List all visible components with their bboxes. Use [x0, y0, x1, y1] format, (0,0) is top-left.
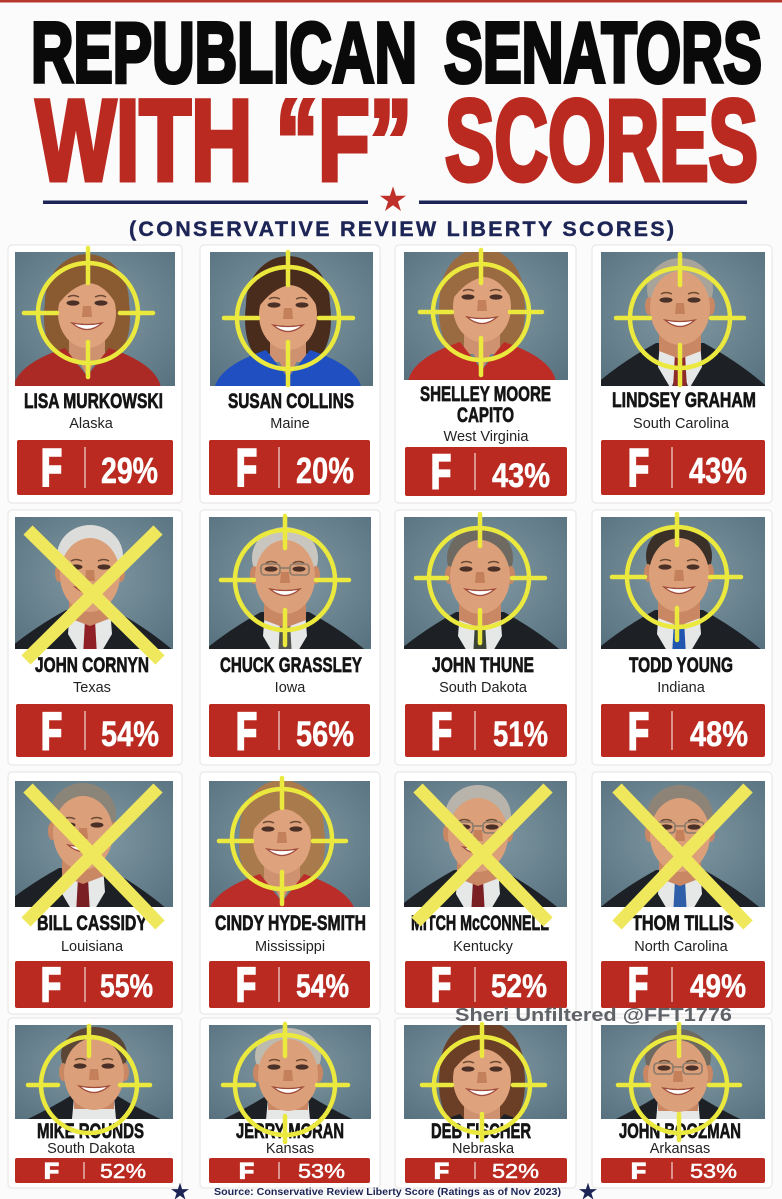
- portrait: [601, 252, 765, 386]
- portrait: [601, 781, 765, 907]
- crosshair: [416, 514, 545, 643]
- state: Texas: [73, 680, 111, 696]
- score bar: F: [628, 958, 648, 1011]
- score bar: 52%: [492, 1161, 539, 1183]
- score bar: 48%: [690, 715, 748, 754]
- score bar: 53%: [298, 1161, 345, 1183]
- score bar: F: [239, 1158, 254, 1184]
- score bar: F: [434, 1158, 449, 1184]
- state: Louisiana: [61, 939, 124, 955]
- state: Kentucky: [453, 939, 514, 955]
- score bar: [601, 439, 765, 498]
- crossed out mark: [26, 530, 160, 660]
- score bar: 55%: [100, 968, 153, 1004]
- score bar: [405, 958, 567, 1011]
- state: South Dakota: [439, 680, 528, 696]
- score bar: [405, 1158, 567, 1184]
- card: Shelley Moore Capito: [395, 245, 576, 503]
- name: CHUCK GRASSLEY: [220, 653, 362, 677]
- score bar: F: [628, 439, 649, 498]
- score bar: 52%: [491, 968, 547, 1004]
- name: SUSAN COLLINS: [228, 389, 354, 413]
- icon: navy star right: [579, 1183, 597, 1199]
- score bar: F: [631, 1158, 646, 1184]
- crosshair: [420, 250, 542, 375]
- portrait: [15, 1025, 173, 1119]
- portrait: [15, 517, 173, 649]
- name: [420, 382, 551, 427]
- crosshair: [219, 778, 346, 904]
- name: MIKE ROUNDS: [37, 1119, 144, 1143]
- top red stripe: [0, 0, 782, 2]
- state: Nebraska: [452, 1141, 515, 1157]
- score bar: [17, 439, 173, 498]
- score bar: 56%: [296, 715, 354, 754]
- score bar: 49%: [690, 968, 746, 1004]
- score bar: [209, 1158, 370, 1184]
- card: Mitch McConnell: [393, 772, 576, 1014]
- portrait: [404, 517, 567, 649]
- card: Lisa Murkowski: [8, 245, 182, 503]
- card: Mike Rounds: [8, 1018, 182, 1188]
- score bar: [15, 958, 173, 1011]
- score bar: F: [44, 1158, 59, 1184]
- portrait: [15, 781, 173, 907]
- portrait: [15, 252, 175, 386]
- score bar: F: [41, 958, 61, 1011]
- crosshair: [28, 1026, 150, 1133]
- crossed out mark: [26, 788, 160, 925]
- name: JOHN CORNYN: [35, 653, 149, 677]
- crosshair: [618, 1024, 740, 1140]
- score bar: F: [431, 703, 452, 761]
- name: LISA MURKOWSKI: [24, 389, 163, 413]
- score bar: [209, 958, 370, 1011]
- name: THOM TILLIS: [632, 911, 734, 935]
- crosshair: [221, 516, 349, 645]
- name: CINDY HYDE-SMITH: [215, 911, 366, 935]
- card: John Thune: [395, 510, 576, 765]
- title line two: WITH “F”: [36, 77, 412, 205]
- portrait: [209, 1025, 371, 1119]
- card: Todd Young: [592, 510, 772, 765]
- score bar: [405, 703, 567, 761]
- name: JERRY MORAN: [236, 1119, 344, 1143]
- state: North Carolina: [634, 939, 729, 955]
- title: [31, 6, 762, 205]
- name: MITCH McCONNELL: [411, 911, 549, 935]
- name: CAPITO: [457, 403, 514, 427]
- crossed out mark: [416, 788, 548, 922]
- portrait: [404, 252, 568, 380]
- score bar: [16, 703, 173, 761]
- portrait: [209, 517, 371, 649]
- state: Iowa: [275, 680, 306, 696]
- name: TODD YOUNG: [629, 653, 733, 677]
- state: West Virginia: [444, 429, 529, 445]
- state: Arkansas: [650, 1141, 710, 1157]
- score bar: [405, 446, 567, 499]
- score bar: F: [628, 703, 649, 761]
- card: Jerry Moran: [200, 1018, 380, 1188]
- score bar: 29%: [101, 450, 158, 491]
- portrait: [404, 1025, 567, 1119]
- subtitle: (CONSERVATIVE REVIEW LIBERTY SCORES): [129, 217, 674, 241]
- card: John Cornyn: [5, 510, 182, 765]
- name: SHELLEY MOORE: [420, 382, 551, 406]
- card: Chuck Grassley: [200, 510, 380, 765]
- watermark: Sheri Unfiltered @FFT1776: [455, 1005, 732, 1025]
- score bar: 43%: [492, 457, 550, 495]
- source note: Source: Conservative Review Liberty Score (Ratings as of Nov 2023): [214, 1187, 561, 1198]
- state: Kansas: [266, 1141, 314, 1157]
- score bar: F: [431, 958, 451, 1011]
- score bar: 20%: [296, 450, 354, 491]
- state: Alaska: [69, 416, 114, 432]
- portrait: [210, 252, 373, 386]
- title line one: REPUBLICAN: [31, 6, 417, 101]
- crosshair: [223, 1024, 348, 1142]
- divider with star: [43, 186, 747, 211]
- state: Maine: [270, 416, 310, 432]
- score bar: [209, 439, 370, 498]
- card: Thom Tillis: [592, 772, 772, 1014]
- name: BILL CASSIDY: [37, 911, 147, 935]
- portrait: [601, 517, 765, 649]
- score bar: F: [236, 958, 256, 1011]
- card: Susan Collins: [200, 245, 380, 503]
- score bar: 52%: [100, 1161, 146, 1183]
- score bar: [601, 958, 765, 1011]
- crosshair: [422, 1024, 545, 1140]
- portrait: [404, 781, 567, 907]
- score bar: F: [41, 439, 62, 498]
- card: Deb Fischer: [395, 1018, 576, 1188]
- portrait: [601, 1025, 765, 1119]
- score bar: 54%: [296, 968, 349, 1004]
- score bar: 53%: [690, 1161, 737, 1183]
- score bar: F: [431, 446, 451, 499]
- card: Lindsey Graham: [592, 245, 772, 503]
- score bar: F: [41, 703, 62, 761]
- icon: red star: [380, 186, 406, 211]
- icon: navy star left: [171, 1183, 189, 1199]
- score bar: [601, 703, 765, 761]
- state: South Dakota: [47, 1141, 136, 1157]
- score bar: 54%: [101, 715, 159, 754]
- crosshair: [612, 514, 741, 640]
- name: DEB FISCHER: [431, 1119, 531, 1143]
- state: South Carolina: [633, 416, 730, 432]
- score bar: F: [236, 703, 257, 761]
- card: Bill Cassidy: [0, 772, 182, 1014]
- crossed out mark: [617, 788, 748, 925]
- crosshair: [224, 252, 353, 385]
- state: Mississippi: [255, 939, 325, 955]
- state: Indiana: [657, 680, 706, 696]
- score bar: [209, 703, 370, 761]
- crosshair: [616, 254, 744, 385]
- card: Cindy Hyde-Smith: [200, 772, 380, 1014]
- score bar: F: [236, 439, 257, 498]
- crosshair: [24, 248, 153, 377]
- portrait: [209, 781, 370, 907]
- score bar: 51%: [493, 715, 548, 754]
- score bar: [15, 1158, 173, 1184]
- card: John Boozman: [592, 1018, 772, 1188]
- score bar: [601, 1158, 765, 1184]
- score bar: 43%: [689, 450, 747, 491]
- name: JOHN THUNE: [432, 653, 534, 677]
